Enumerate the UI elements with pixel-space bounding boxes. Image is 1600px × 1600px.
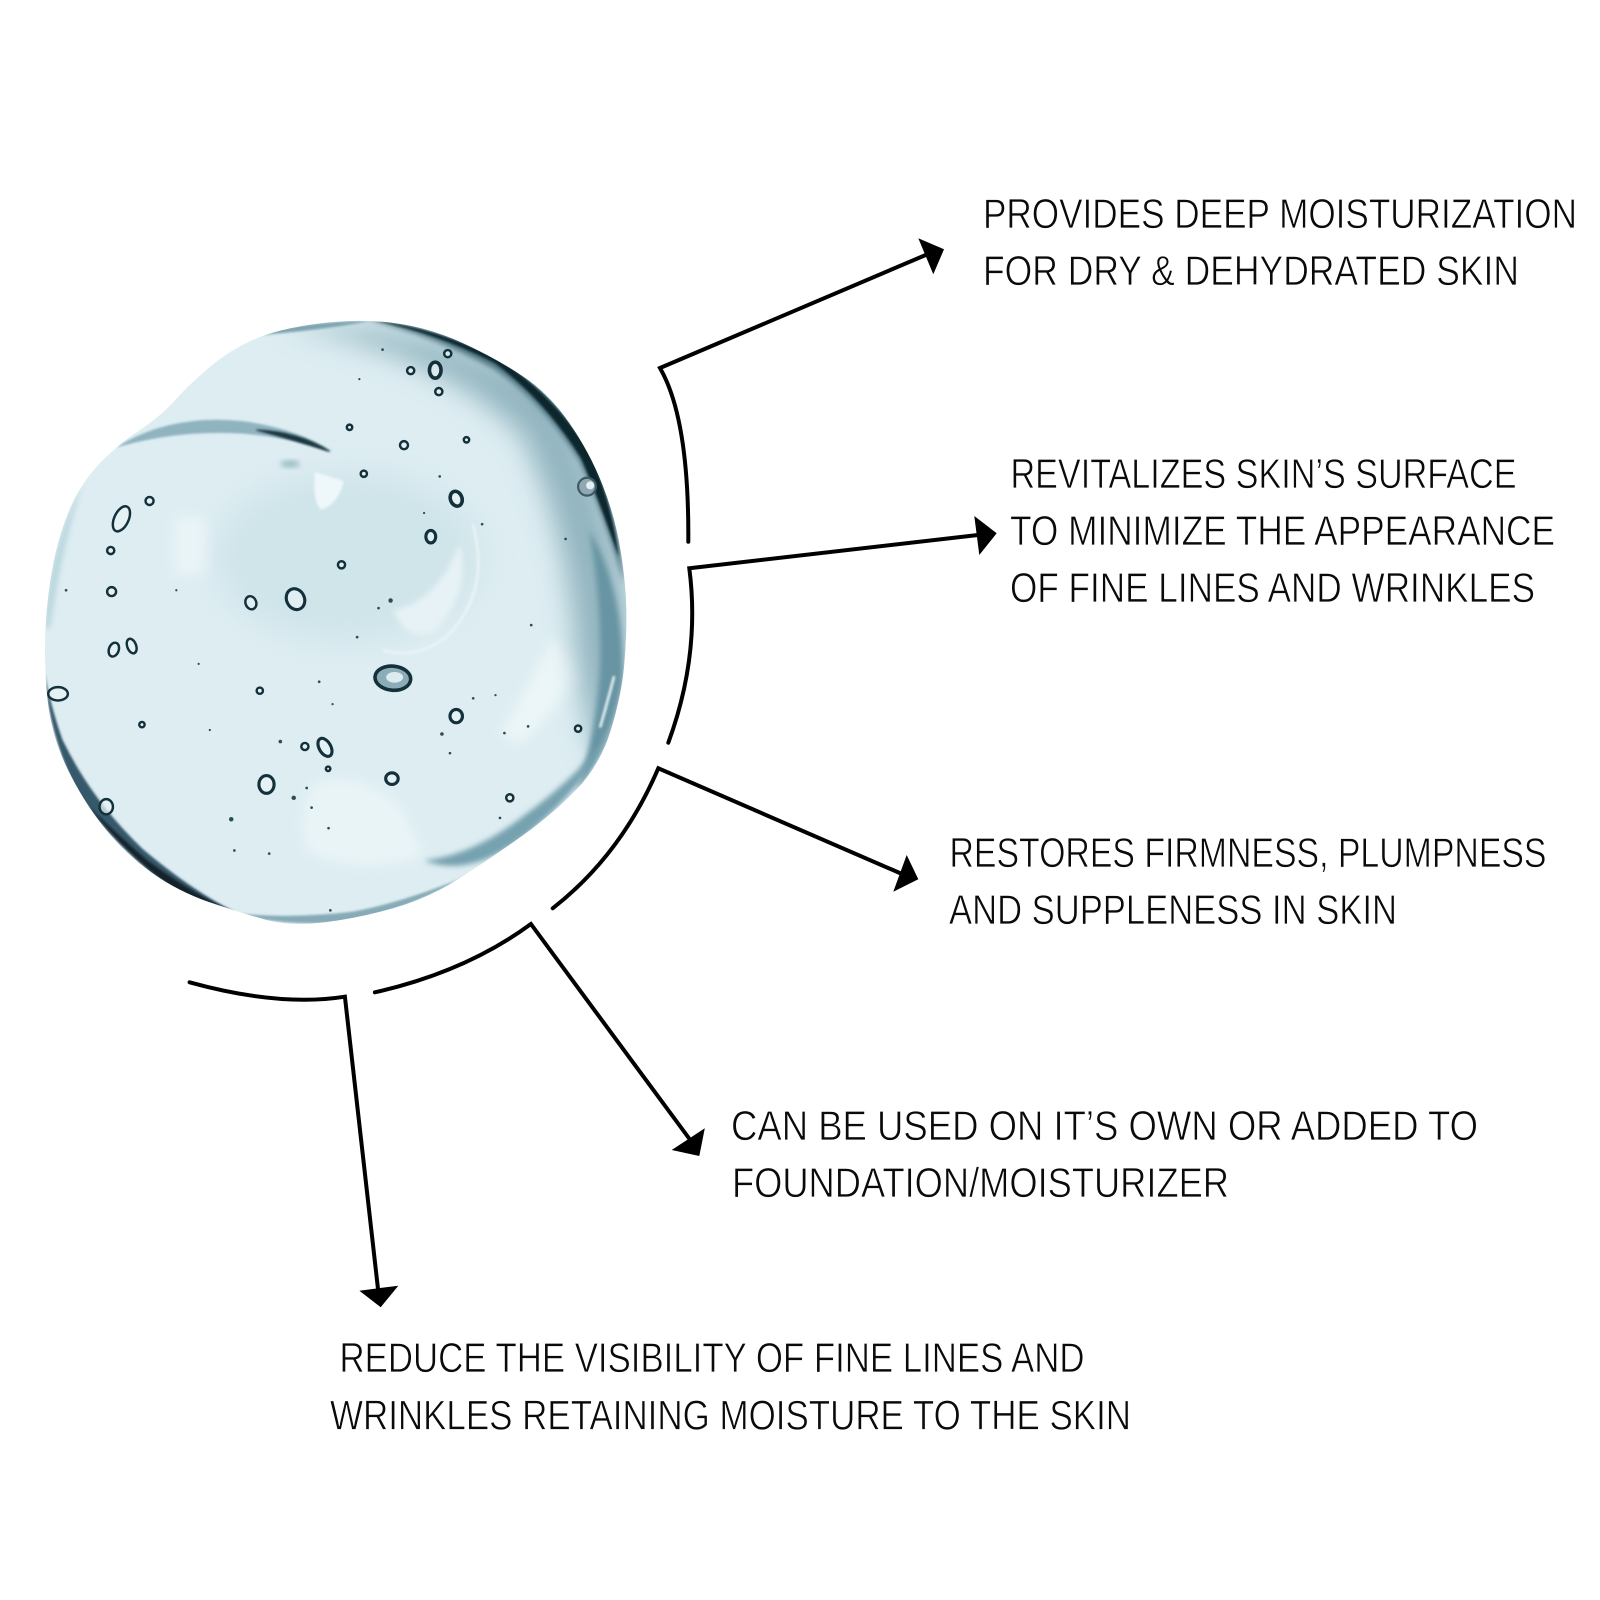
gel fold crease — [116, 420, 333, 467]
text: foundation use: CAN BE USED ON IT’S OWN OR ADDED TO — [731, 1102, 1478, 1149]
gel body — [45, 321, 626, 924]
text: restores firmness — [949, 829, 1546, 933]
arrow 1: to deep moisturization — [660, 238, 944, 542]
text: foundation use — [731, 1102, 1478, 1206]
text: deep moisturization — [983, 190, 1577, 294]
text: foundation use: FOUNDATION/MOISTURIZER — [732, 1159, 1229, 1206]
arrow 3: to restores firmness — [553, 768, 918, 908]
swirl shading — [174, 472, 585, 866]
arrow 5: to reduce visibility — [190, 982, 398, 1307]
arrow 2: to revitalizes surface — [668, 516, 997, 743]
text: deep moisturization: FOR DRY & DEHYDRATED SKIN — [983, 247, 1519, 294]
text: revitalizes surface — [1010, 450, 1555, 611]
air bubbles — [48, 348, 596, 912]
text: reduce visibility: WRINKLES RETAINING MOISTURE TO THE SKIN — [330, 1392, 1131, 1438]
text: reduce visibility — [330, 1334, 1131, 1438]
arrow 4: to foundation use — [375, 924, 705, 1156]
gel edge shading — [45, 319, 629, 923]
gel blob with bubbles — [45, 320, 626, 924]
text: reduce visibility: REDUCE THE VISIBILITY OF FINE LINES AND — [340, 1334, 1084, 1381]
text: restores firmness: AND SUPPLENESS IN SKIN — [949, 886, 1397, 933]
